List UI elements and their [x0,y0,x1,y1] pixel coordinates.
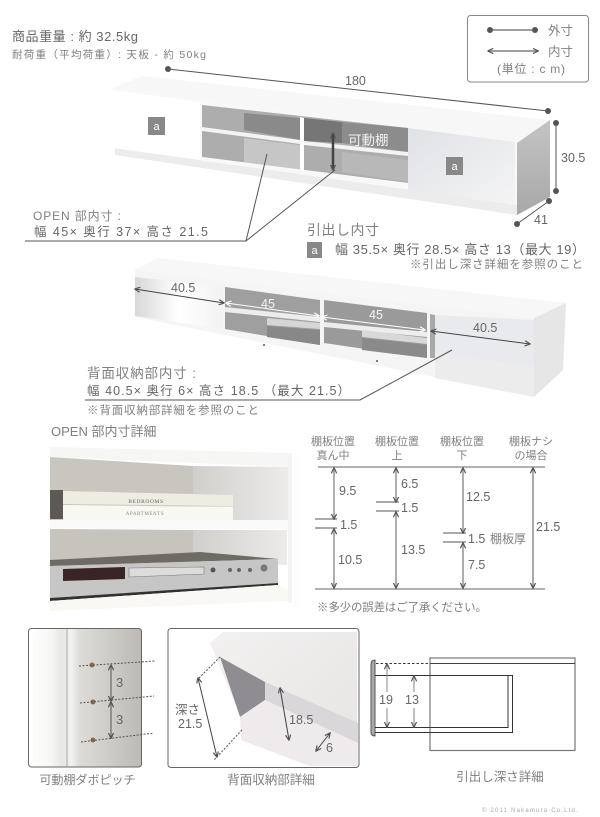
legend: (単位 : c m) [497,62,565,76]
shelf position headings: 棚板位置 [375,434,419,448]
diagram: drawer depth: 19 [379,693,393,707]
column: top [376,468,425,588]
rear compartment callout: 背面収納部内寸 : [87,366,196,381]
furniture photo: front view [112,76,550,215]
column: bottom: 12.5 [466,490,490,504]
center-right opening [324,300,427,358]
panel caption: rear storage detail: 背面収納部詳細 [227,772,315,787]
column: bottom: 1.5 [468,532,485,546]
dimension: height 30.5 [556,123,585,191]
column: top: 6.5 [401,477,418,491]
weight text: 耐荷重（平均荷重）: 天板 - 約 50kg [12,48,206,61]
legend: 外寸 [548,24,573,38]
rear dimension 45 left: 45 [261,297,275,311]
DVD player [50,552,278,601]
open shelf compartment [202,105,408,187]
OPEN compartment callout: OPEN 部内寸 : [33,209,121,223]
column: bottom: 7.5 [468,558,485,572]
shelf position headings: 棚板ナシ [509,434,553,448]
shelf position headings: 真ん中 [316,448,350,462]
movable shelf arrow and label: 可動棚 [348,133,388,148]
center-left opening [225,287,320,345]
shelf position headings: の場合 [514,449,548,462]
panel: shelf pin pitch [28,628,155,767]
dimension: depth 41: 41 [534,213,548,227]
weight text [12,29,206,61]
rear compartment callout [85,350,452,417]
movable shelf arrow and label [333,133,388,170]
panel: rear storage detail: 深さ [175,703,200,717]
right rear cavity [435,315,534,367]
OPEN compartment callout [25,154,335,241]
shelf position headings: 棚板位置 [440,434,484,448]
drawer inner dimensions [307,222,585,271]
right drawer [408,128,515,205]
legend [468,16,588,82]
panel: rear storage detail: 18.5 [289,713,313,727]
weight text: 商品重量 : 約 32.5kg [12,29,138,44]
diagram: drawer depth [371,658,575,750]
dimension: height 30.5: 30.5 [561,151,585,165]
diagram: drawer depth: 13 [405,693,419,707]
left drawer: a [153,121,160,133]
rear dimension 45 right [322,308,425,330]
shelf position headings: 上 [392,449,402,462]
drawer inner dimensions: a [311,245,318,257]
furniture photo: rear view [135,258,566,397]
column: top: 13.5 [401,543,425,557]
panel: shelf pin pitch: 3 [116,712,123,727]
rear dimension 40.5 right [431,321,530,344]
column: bottom: 棚板厚 [490,531,526,546]
column: middle: 10.5 [338,553,362,567]
panel: rear storage detail: 21.5 [178,717,202,731]
heading: OPEN detail: OPEN 部内寸詳細 [51,424,156,439]
column: no shelf: 21.5 [536,520,560,534]
rear compartment callout: 幅 40.5× 奥行 6× 高さ 18.5 （最大 21.5） [87,383,350,398]
rear compartment callout: ※背面収納部詳細を参照のこと [87,403,259,417]
drawer inner dimensions: 引出し内寸 [307,222,379,238]
column: middle [315,468,362,588]
dimension: depth 41 [517,201,549,227]
OPEN compartment callout: 幅 45× 奥行 37× 高さ 21.5 [34,224,208,239]
drawer inner dimensions: ※引出し深さ詳細を参照のこと [410,257,583,271]
books: APARTMENTS [126,512,164,517]
drawer inner dimensions: 幅 35.5× 奥行 28.5× 高さ 13（最大 19） [335,242,585,257]
panel: rear storage detail: 6 [326,741,333,755]
column: middle: 9.5 [339,484,356,498]
panel caption: shelf pin pitch: 可動棚ダボピッチ [39,772,136,787]
shelf position headings: 下 [456,450,468,462]
right drawer: a [451,161,458,173]
left rear cavity [135,277,223,329]
shelf position chart [315,467,560,589]
shelf position headings: 棚板位置 [311,434,355,448]
books: BEDROOMS [128,499,164,505]
books [50,490,233,520]
legend: 内寸 [548,45,573,59]
dimension: width 180: 180 [345,74,366,88]
dimension: width 180 [168,69,548,111]
panel: rear storage detail [168,628,359,768]
panel: shelf pin pitch: 3 [116,675,123,690]
caption: drawer depth: 引出し深さ詳細 [456,769,544,784]
left drawer [112,90,200,160]
rear dimension 40.5 left: 40.5 [171,281,195,295]
column: bottom [443,468,526,588]
photo: open compartment with books and DVD player [50,446,302,611]
rear dimension 45 right: 45 [369,308,383,322]
shelf position headings [311,434,553,462]
column: top: 1.5 [401,501,418,515]
column: no shelf [533,468,560,588]
column: middle: 1.5 [340,518,357,532]
copyright: © 2011 Nakamura Co.Ltd. [482,807,579,814]
rear dimension 40.5 left [135,281,224,303]
rear dimension 45 left [226,297,319,316]
chart note: ※多少の誤差はご了承ください。 [317,600,487,614]
rear dimension 40.5 right: 40.5 [473,321,497,335]
